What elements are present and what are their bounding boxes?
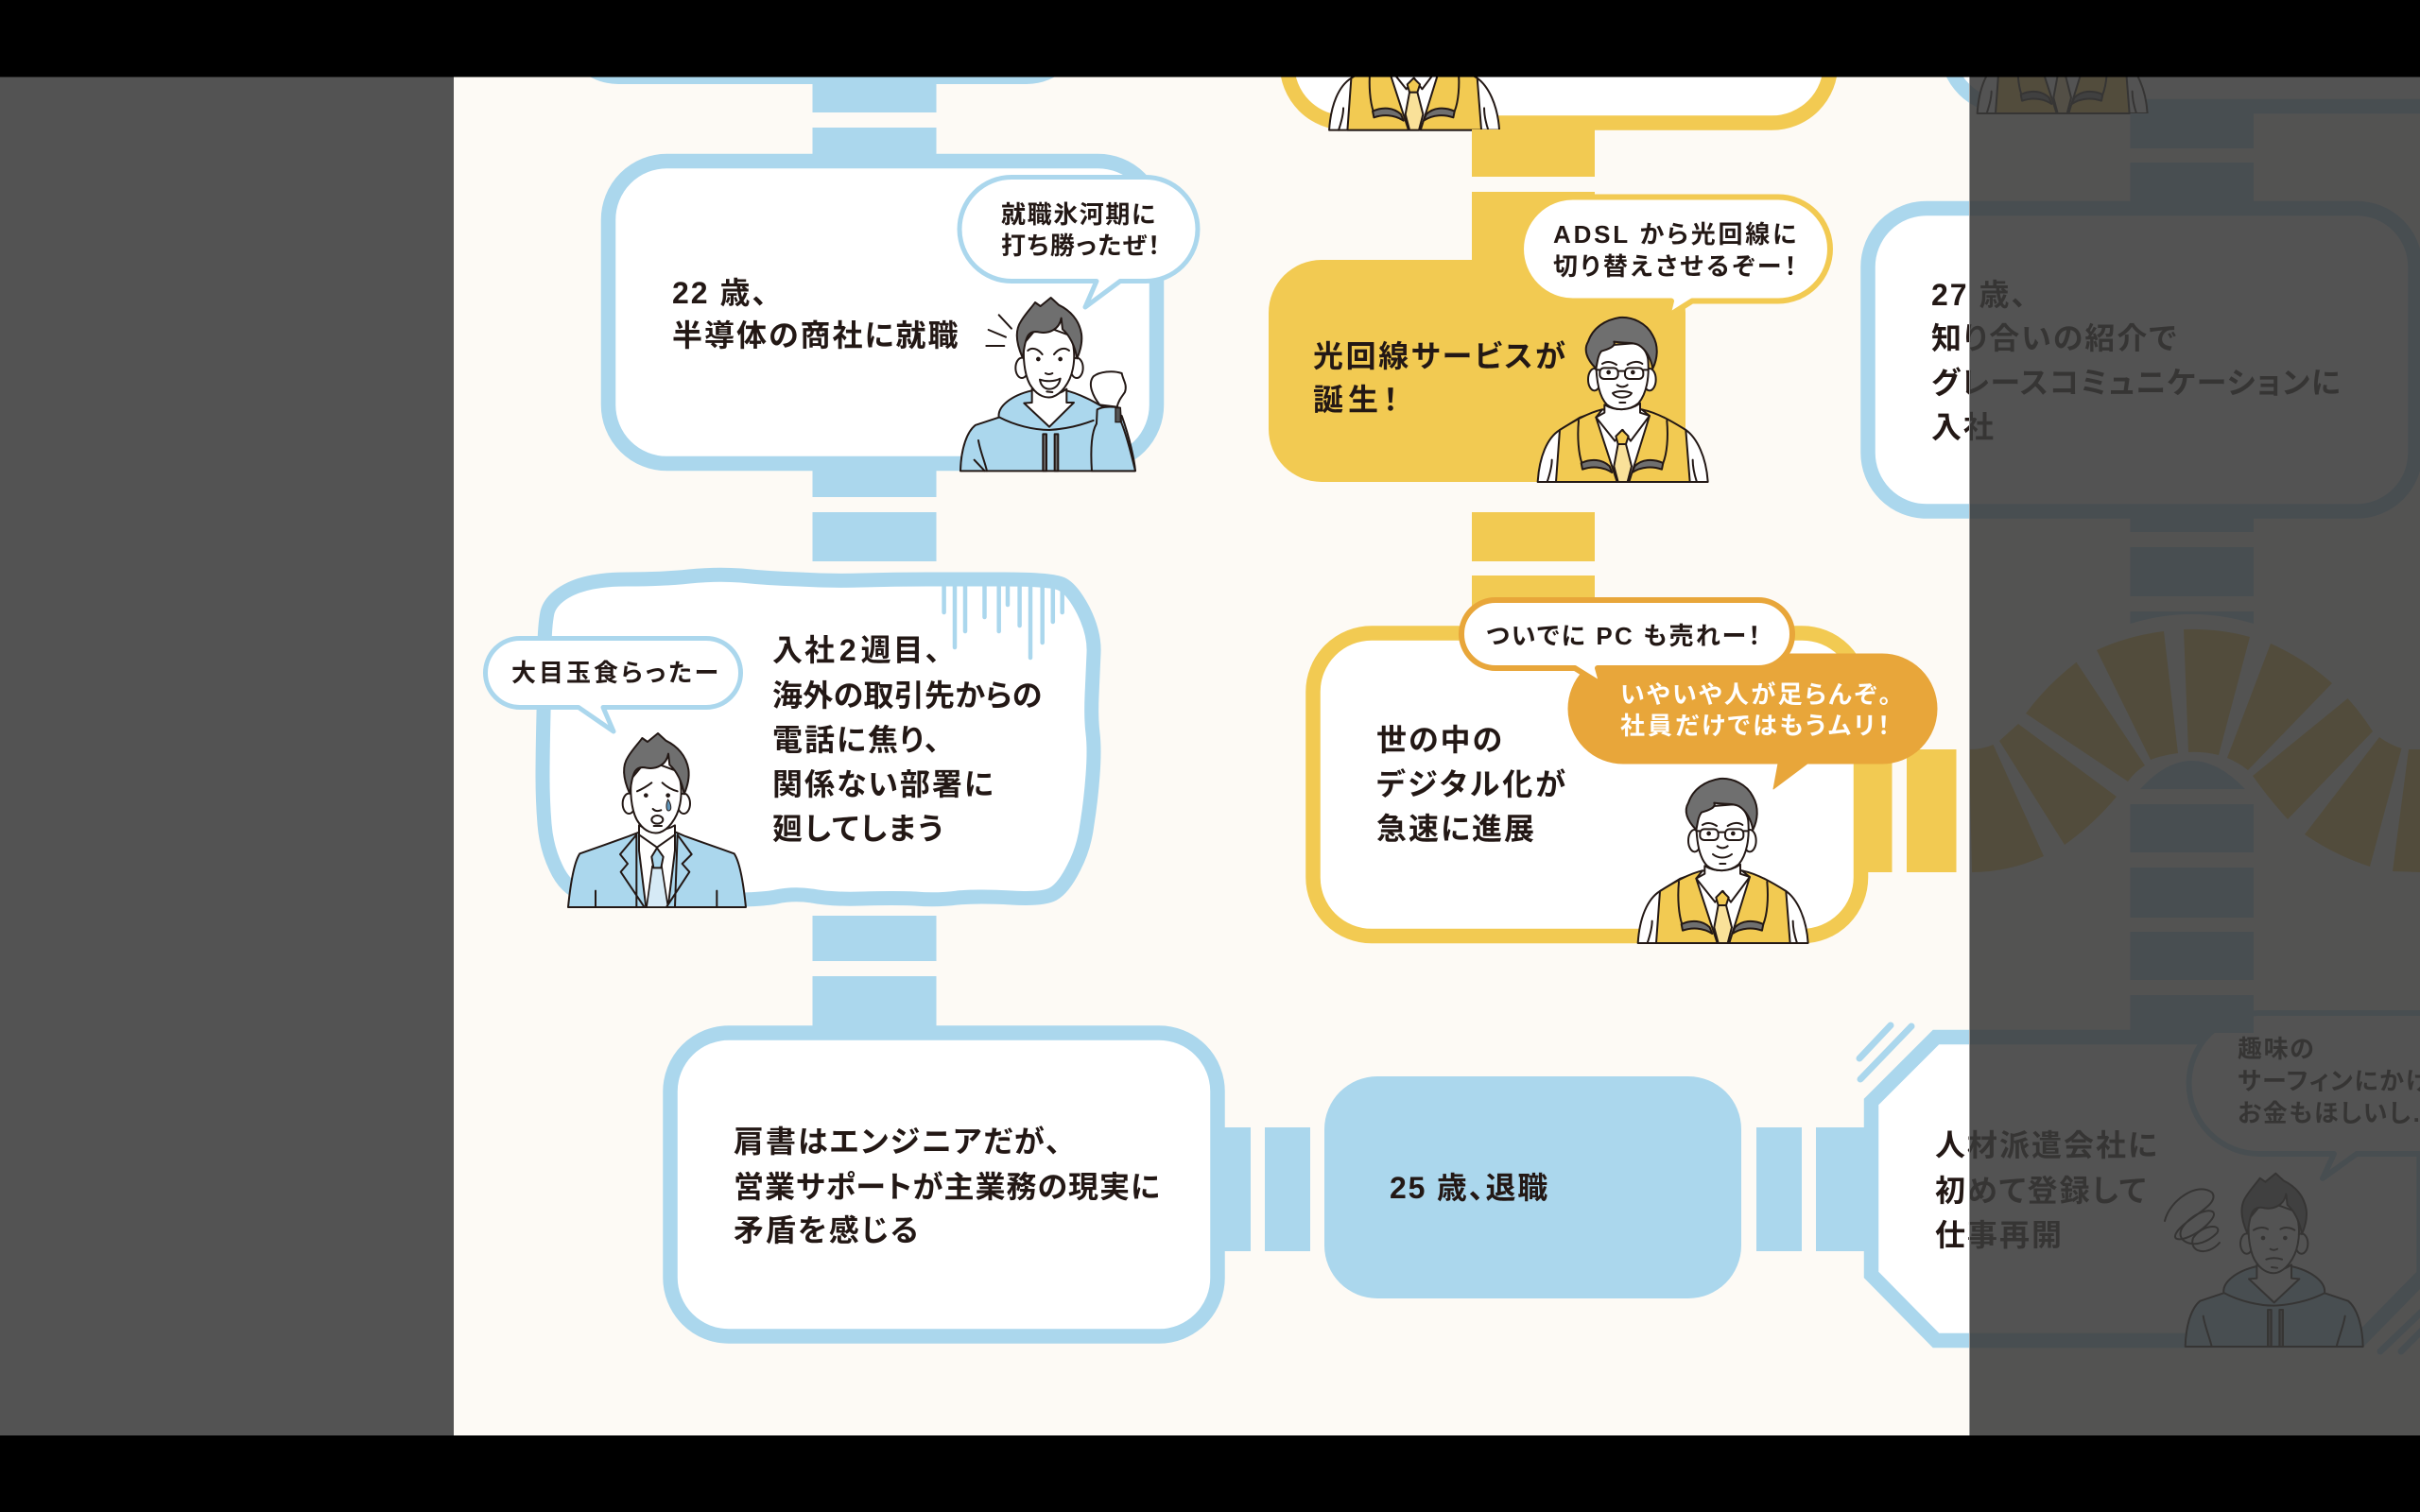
panel: octagon temp agency	[1859, 1013, 2420, 1351]
text: temp agency: 人材派遣会社に	[1935, 1128, 2159, 1162]
character: worried man in hoodie	[2186, 1174, 2363, 1347]
text: fiber born	[1313, 339, 1568, 417]
speech bubble: sell PCs too: ついでに PC も売れー！	[1486, 622, 1762, 650]
connector: blue column right	[2131, 113, 2254, 1033]
text: contradiction	[734, 1125, 1161, 1247]
panel: 22 years old job	[609, 161, 1198, 471]
speech bubble: switch ADSL to fiber: 切り替えさせるぞー！	[1553, 252, 1800, 281]
text: joined at 27: 27 歳、	[1931, 278, 2029, 312]
speech bubble: got scolded	[486, 639, 741, 731]
panel: top blue box fragment	[560, 0, 1085, 84]
chart: arch wheel segments	[1969, 629, 2420, 872]
speech bubble: not enough people: いやいや人が足らんぞ。	[1620, 680, 1893, 709]
character: glasses man smiling	[1638, 779, 1808, 943]
icicles	[944, 581, 1063, 658]
text: first weeks mistake: 廻してしまう	[772, 812, 945, 846]
character: fist pump in hoodie	[960, 298, 1135, 471]
speech bubble: beat the job ice age: 打ち勝ったぜ！	[1001, 232, 1162, 260]
panel: frozen box	[486, 575, 1094, 907]
panel: digitalization	[1313, 600, 1937, 943]
text: temp agency	[1935, 1128, 2159, 1252]
decorative slashes	[1859, 1025, 2420, 1351]
text: fiber born: 光回線サービスが	[1313, 339, 1568, 373]
text: contradiction: 肩書はエンジニアだが、	[734, 1125, 1063, 1159]
panel: top yellow box fragment	[1288, 0, 1830, 130]
connector: horizontal blue pieces	[1224, 1127, 1866, 1251]
character: glasses man fragment right	[1978, 35, 2148, 113]
text: temp agency: 仕事再開	[1935, 1218, 2064, 1252]
panel: top right box fragment	[1947, 0, 2420, 113]
connector: yellow column	[1472, 129, 1595, 632]
panel: resign at 25: 25 歳、退職	[1390, 1171, 1549, 1205]
speech bubble: beat the job ice age: 就職氷河期に	[1001, 200, 1157, 229]
text: joined at 27: 入社	[1931, 410, 1996, 444]
text: digitalization	[1376, 723, 1568, 846]
text: temp agency: 初めて登録して	[1935, 1174, 2148, 1208]
speech bubble: got scolded: 大目玉食らったー	[511, 659, 721, 687]
text: job at semiconductor trader: 22 歳、	[672, 276, 769, 310]
speech bubble: beat the job ice age	[959, 178, 1198, 307]
text: first weeks mistake: 海外の取引先からの	[772, 679, 1043, 713]
connector: blue column one	[813, 84, 936, 1028]
text: contradiction: 営業サポートが主業務の現実に	[734, 1170, 1161, 1204]
character: glasses man talking	[1538, 318, 1708, 482]
text: contradiction: 矛盾を感じる	[734, 1213, 920, 1247]
text: joined at 27: グレースコミュニケーションに	[1931, 366, 2342, 400]
speech bubble: surfing money	[2189, 1013, 2420, 1178]
text: first weeks mistake: 入社 2 週目、	[772, 633, 942, 667]
text: job at semiconductor trader	[672, 276, 960, 352]
dark panel: left side	[0, 0, 454, 1512]
connector: yellow to arch	[1862, 749, 1957, 872]
letterbox: bottom	[0, 1435, 2420, 1512]
text: first weeks mistake: 関係ない部署に	[772, 767, 995, 801]
text: first weeks mistake: 電話に焦り、	[772, 723, 942, 757]
speech bubble: not enough people	[1568, 654, 1937, 789]
text: joined at 27	[1931, 278, 2342, 444]
character: crying man in suit	[568, 733, 746, 907]
speech bubble: surfing money: 趣味の	[2238, 1035, 2315, 1063]
text: digitalization: 急速に進展	[1376, 812, 1536, 846]
panel: title engineer contradiction	[670, 1033, 1218, 1336]
text: fiber born: 誕生！	[1313, 383, 1403, 417]
text: digitalization: デジタル化が	[1376, 767, 1568, 801]
panel: joined Grace Communications at 27	[1868, 208, 2415, 511]
text: digitalization: 世の中の	[1376, 723, 1504, 757]
panel: resign at 25	[1324, 1076, 1741, 1298]
scribble	[2165, 1189, 2220, 1251]
speech bubble: switch ADSL to fiber: ADSL から光回線に	[1553, 220, 1799, 249]
speech bubble: switch ADSL to fiber	[1521, 197, 1830, 317]
speech bubble: sell PCs too	[1461, 600, 1792, 685]
character: glasses man fragment	[1329, 51, 1499, 130]
dark overlay: right side	[1969, 0, 2420, 1512]
letterbox: top	[0, 0, 2420, 77]
speech bubble: not enough people: 社員だけではもうムリ！	[1620, 712, 1893, 740]
text: job at semiconductor trader: 半導体の商社に就職	[672, 318, 960, 352]
panel: fiber service born	[1269, 197, 1830, 482]
text: first weeks mistake	[772, 633, 1043, 846]
text: joined at 27: 知り合いの紹介で	[1931, 321, 2178, 355]
